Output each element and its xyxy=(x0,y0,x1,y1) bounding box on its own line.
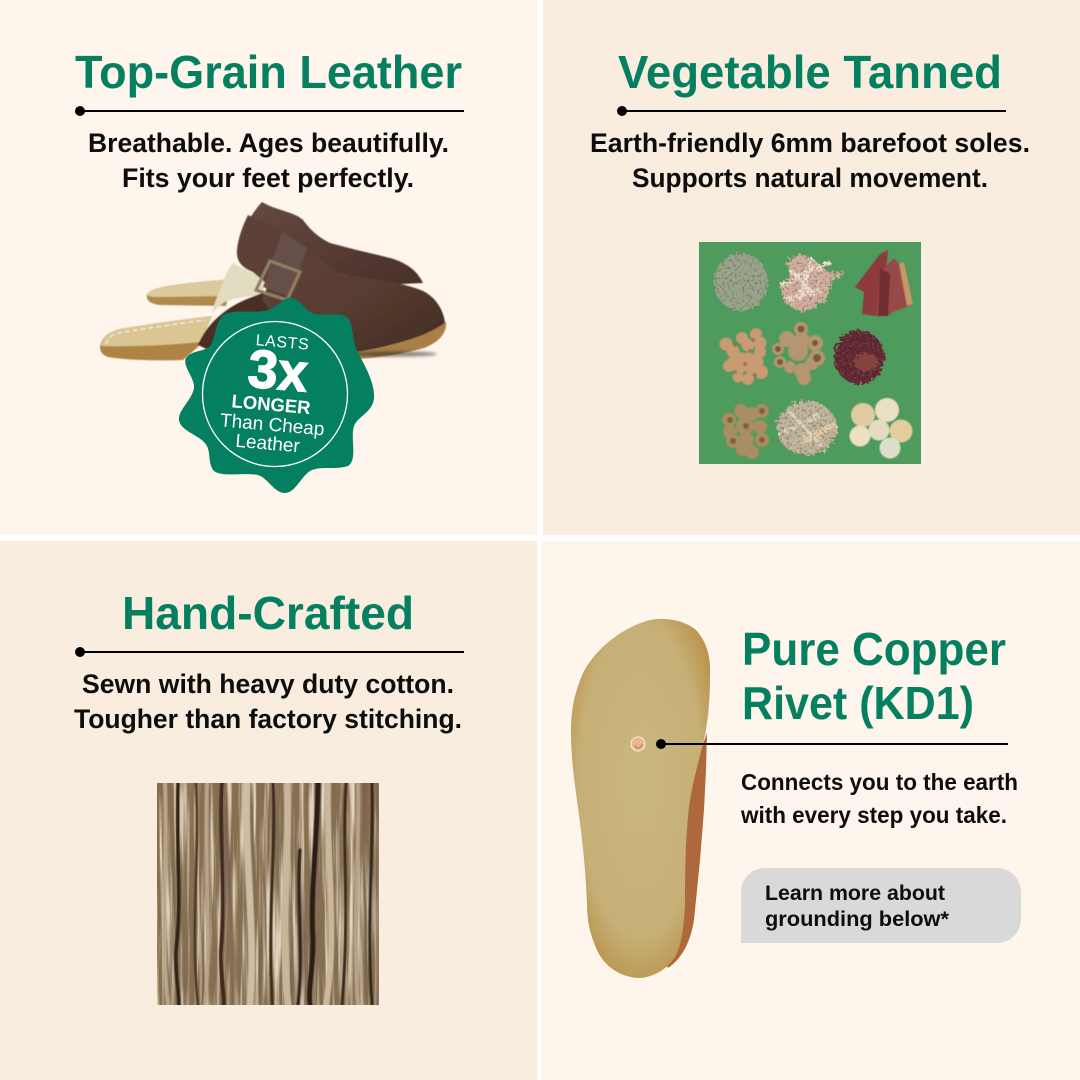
description text: with every step you take. xyxy=(740,802,1007,828)
panel: pure copper rivet xyxy=(565,615,1021,985)
description text xyxy=(590,128,1030,193)
cluster: pale wood chips xyxy=(777,401,837,455)
image: tanning plant materials on green xyxy=(699,242,921,464)
heading: vegetable tanned: Vegetable Tanned xyxy=(618,46,1002,98)
badge label: lasts: LASTS xyxy=(255,332,310,354)
divider with dot xyxy=(617,106,1006,116)
badge label: leather: Leather xyxy=(235,431,301,457)
shoe shadow xyxy=(353,352,437,356)
icon: copper rivet xyxy=(631,737,645,751)
badge number: 3x: 3x xyxy=(245,339,311,404)
divider with dot xyxy=(75,647,464,657)
cluster: grey-green leaf powder xyxy=(714,253,768,311)
description text: Fits your feet perfectly. xyxy=(122,163,414,193)
description text: Connects you to the earth xyxy=(741,769,1018,795)
cluster: sliced dried fruit xyxy=(722,404,769,459)
cluster: hazelnut-like nuts xyxy=(720,328,768,385)
heading: top-grain leather: Top-Grain Leather xyxy=(75,46,462,98)
heading: pure copper rivet: Rivet (KD1) xyxy=(742,677,974,729)
panel: top-grain leather xyxy=(75,46,464,493)
callout: learn more about grounding: grounding below* xyxy=(765,907,950,931)
description text: Tougher than factory stitching. xyxy=(74,704,462,734)
cluster: pink bark shavings xyxy=(780,254,846,312)
cluster: dried acorn cups xyxy=(772,322,825,385)
callout: learn more about grounding xyxy=(741,868,1021,943)
description text xyxy=(74,669,462,734)
panel: hand-crafted xyxy=(74,587,464,1005)
divider with dot xyxy=(656,739,1008,749)
cluster: pale round fruits xyxy=(850,398,912,458)
description text: Breathable. Ages beautifully. xyxy=(88,128,449,158)
description text: Earth-friendly 6mm barefoot soles. xyxy=(590,128,1030,158)
description text: Sewn with heavy duty cotton. xyxy=(82,669,454,699)
image: leather slip-on shoes xyxy=(100,202,446,360)
description text xyxy=(88,128,449,193)
description text: Supports natural movement. xyxy=(632,163,988,193)
divider with dot xyxy=(75,106,464,116)
description text xyxy=(740,769,1018,828)
panel: vegetable tanned xyxy=(590,46,1030,464)
cluster: red bark sticks xyxy=(855,250,913,316)
heading: pure copper rivet: Pure Copper xyxy=(742,623,1006,675)
heading: pure copper rivet xyxy=(742,623,1006,729)
badge label: than cheap: Than Cheap xyxy=(219,410,325,440)
badge label: longer: LONGER xyxy=(231,390,311,418)
image: shoe sole with copper rivet xyxy=(565,615,715,985)
heading: hand-crafted: Hand-Crafted xyxy=(122,587,414,639)
callout: learn more about grounding: Learn more about xyxy=(765,881,945,905)
cluster: dark red dried petals xyxy=(834,330,884,384)
image: cotton thread strands xyxy=(157,783,379,1005)
badge: lasts 3x longer xyxy=(179,298,374,493)
